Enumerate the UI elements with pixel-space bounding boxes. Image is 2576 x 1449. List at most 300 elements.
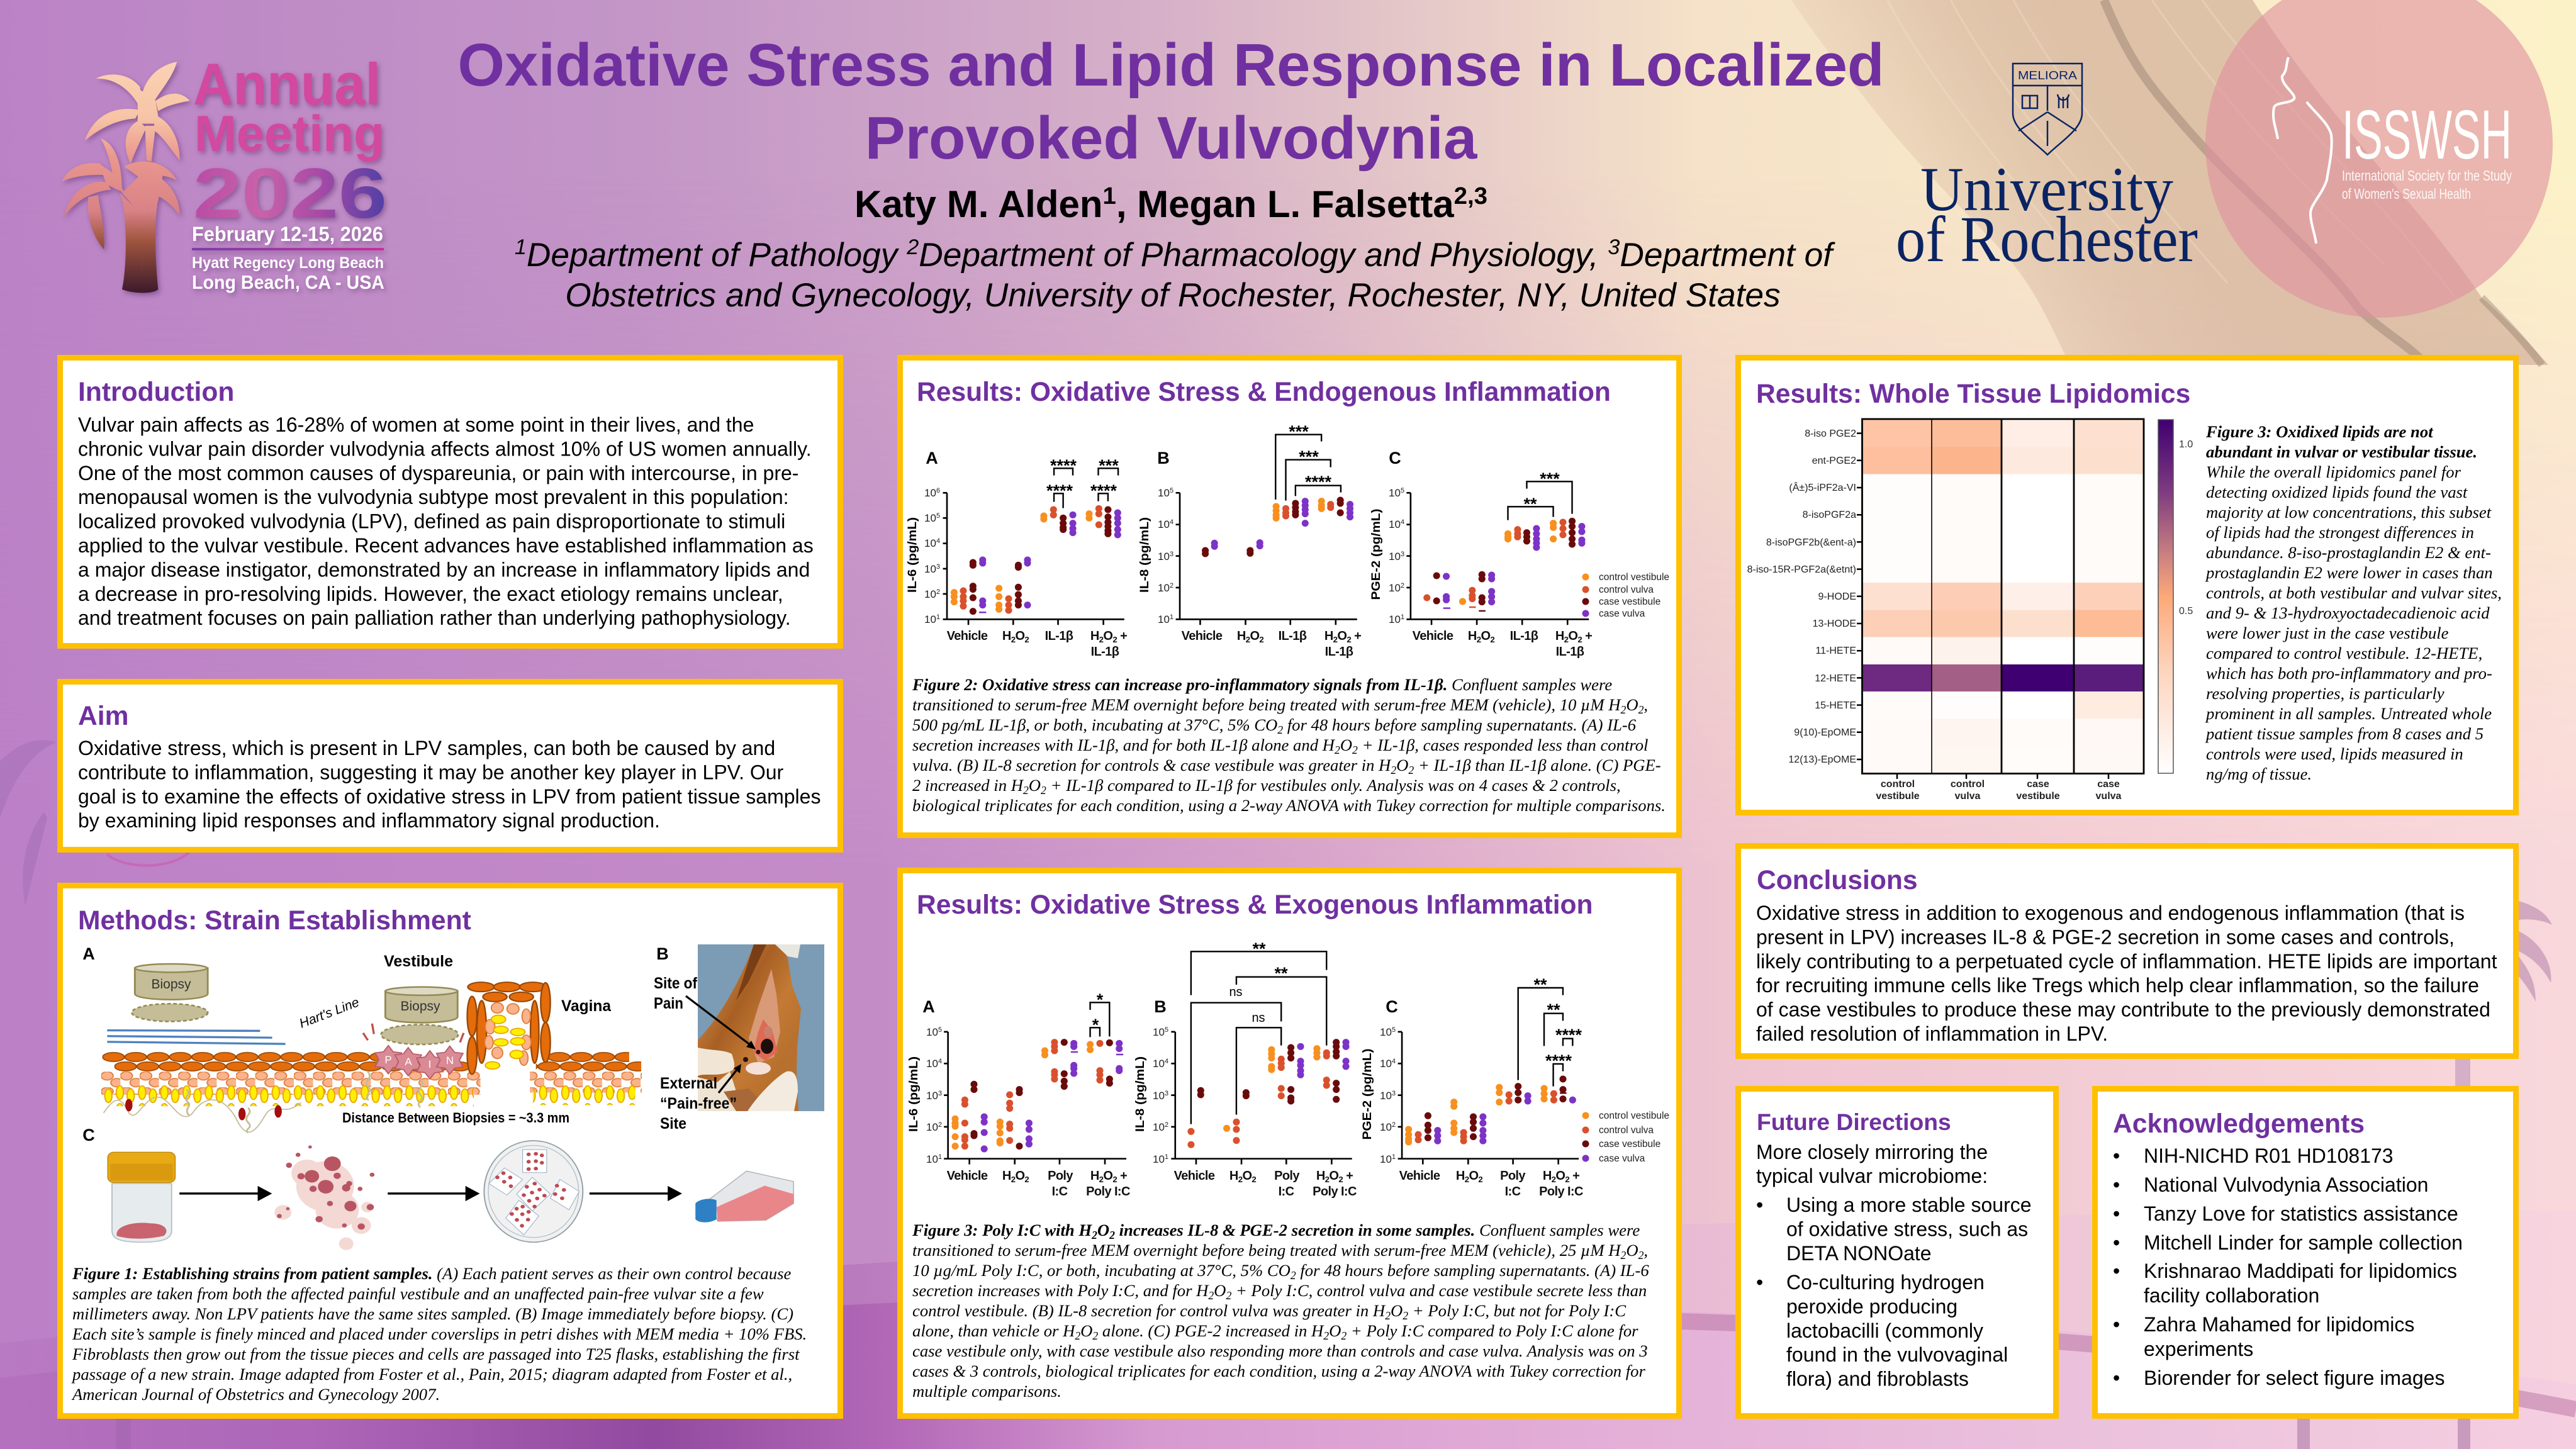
- text: conclusions body: for recruiting immune cells like Tregs which help clear inflammation, so the failure: [1756, 974, 2479, 997]
- chart: figure 2 A/B/C dot plots: ****: [1090, 481, 1117, 500]
- text: future directions body: found in the vulvovaginal: [1786, 1343, 2008, 1366]
- chart: figure 3 A/B/C dot plots: H2O2: [1456, 1169, 1482, 1184]
- heading: exogenous results: Results: Oxidative Stress & Exogenous Inflammation: [917, 890, 1593, 920]
- chart: figure 3 A/B/C dot plots: IL-6 (pg/mL): [907, 1056, 921, 1132]
- chart: figure 2 A/B/C dot plots: H2O2: [1468, 629, 1494, 644]
- diagram: biopsy sites in tissue: [101, 964, 642, 1133]
- panel: aim: [60, 682, 841, 849]
- title: Provoked Vulvodynia: [865, 104, 1477, 172]
- affiliations: Obstetrics and Gynecology, University of Rochester, Rochester, NY, United States: [565, 277, 1781, 314]
- caption: figure 3 lipidomics: detecting oxidized lipids found the vast: [2206, 483, 2468, 501]
- labels: photo: “Pain-free”: [660, 1095, 737, 1112]
- chart: figure 2 A/B/C dot plots: 104: [1389, 518, 1404, 530]
- list: acknowledgements: •: [2113, 1144, 2120, 1167]
- chart: figure 3 A/B/C dot plots: H2O2 +: [1316, 1169, 1353, 1184]
- caption: figure 3 poly I:C: [912, 1221, 1649, 1401]
- chart: figure 3 A/B/C dot plots: ****: [1545, 1051, 1572, 1070]
- heading: future directions: Future Directions: [1757, 1109, 1951, 1135]
- chart: lipid heatmap: 11-HETE: [1815, 646, 1856, 656]
- text: conclusions body: [1756, 902, 2497, 1045]
- text: future directions body: Using a more stable source: [1786, 1194, 2032, 1216]
- color scale: 0.5: [2179, 606, 2193, 617]
- text: future directions body: [1756, 1141, 2032, 1390]
- list: acknowledgements: Zahra Mahamed for lipidomics: [2144, 1313, 2414, 1336]
- text: introduction body: Vulvar pain affects as 16-28% of women at some point in their lives, and the: [78, 413, 754, 436]
- chart: lipid heatmap: case: [2097, 779, 2120, 790]
- chart: figure 2 A/B/C dot plots: H2O2 +: [1555, 629, 1592, 644]
- significance brackets: [1054, 435, 1572, 520]
- legend: case vulva: [1599, 1153, 1645, 1164]
- text: future directions body: of oxidative stress, such as: [1786, 1217, 2028, 1240]
- chart: figure 2 A/B/C dot plots: IL-8 (pg/mL): [1138, 517, 1151, 593]
- chart: figure 3 A/B/C dot plots: 102: [926, 1121, 942, 1133]
- heading: endogenous results: Results: Oxidative Stress & Endogenous Inflammation: [917, 377, 1611, 407]
- chart: figure 3 A/B/C dot plots: Poly: [1048, 1169, 1073, 1183]
- text: future directions body: DETA NONOate: [1786, 1242, 1932, 1265]
- chart: figure 2 A/B/C dot plots: Vehicle: [1182, 629, 1223, 643]
- labels: biopsy diagram: [82, 944, 669, 1144]
- labels: photo: Site of: [654, 975, 698, 992]
- caption: figure 3 lipidomics: abundant in vulvar or vestibular tissue.: [2206, 442, 2477, 461]
- title: Oxidative Stress and Lipid Response in Localized: [457, 31, 1884, 99]
- list: acknowledgements: NIH-NICHD R01 HD108173: [2144, 1144, 2394, 1167]
- caption: figure 2: vulva. (B) IL-8 secretion for controls & case vestibule was greater in H2O2 + IL-1β than IL-1β alone. (C) PGE-: [912, 756, 1661, 776]
- chart: figure 3 A/B/C dot plots: **: [1252, 939, 1266, 958]
- chart: figure 2 A/B/C dot plots: ***: [1289, 422, 1309, 441]
- chart: lipid heatmap: 8-iso PGE2: [1805, 428, 1856, 439]
- chart: figure 3 A/B/C dot plots: 103: [1380, 1090, 1396, 1102]
- chart: figure 3 A/B/C dot plots: H2O2: [1002, 1169, 1029, 1184]
- caption: figure 3 lipidomics: of lipids had the strongest differences in: [2206, 523, 2474, 542]
- legend: control vulva: [1599, 585, 1654, 595]
- list: acknowledgements: [2113, 1144, 2463, 1389]
- chart: lipid heatmap: 8-isoPGF2b(&ent-a): [1766, 537, 1856, 548]
- logo: ISSWSH: International Society for the Study: [2342, 167, 2512, 184]
- text: conclusions body: present in LPV) increases IL-8 & PGE-2 secretion in some cases and controls,: [1756, 926, 2455, 948]
- caption: figure 3 lipidomics: abundance. 8-iso-prostaglandin E2 & ent-: [2206, 543, 2491, 562]
- panel: methods: [60, 886, 841, 1416]
- chart: figure 2 A/B/C dot plots: PGE-2 (pg/mL): [1370, 508, 1383, 600]
- affiliations: 1Department of Pathology 2Department of Pharmacology and Physiology, 3Department of: [515, 235, 1835, 274]
- chart: figure 2 A/B/C dot plots: 104: [924, 537, 940, 549]
- chart: lipid heatmap: (Â±)5-iPF2a-VI: [1789, 481, 1856, 493]
- color scale: [2158, 420, 2193, 773]
- caption: figure 1: passage of a new strain. Image adapted from Foster et al., Pain, 2015; diagram adapted from Foster et al.,: [71, 1365, 792, 1384]
- chart: figure 3 A/B/C dot plots: 101: [1380, 1153, 1396, 1165]
- icon: culture flask: [695, 1171, 793, 1222]
- chart: figure 2 A/B/C dot plots: 101: [924, 613, 940, 625]
- data dots: [954, 501, 1554, 609]
- list: acknowledgements: Krishnarao Maddipati for lipidomics: [2144, 1260, 2457, 1282]
- chart: lipid heatmap: vulva: [1955, 791, 1981, 802]
- caption: figure 3 lipidomics: While the overall lipidomics panel for: [2206, 462, 2461, 481]
- icon: petri dish: [484, 1141, 583, 1242]
- caption: figure 3 lipidomics: prostaglandin E2 were lower in cases than: [2205, 563, 2493, 582]
- chart: lipid heatmap: vulva: [2096, 791, 2122, 802]
- labels: biopsy diagram: Hart's Line: [298, 995, 361, 1031]
- chart: figure 3 A/B/C dot plots: 102: [1153, 1121, 1168, 1133]
- chart: figure 2 A/B/C dot plots: IL-1β: [1091, 645, 1119, 659]
- heading: acknowledgements: Acknowledgements: [2113, 1109, 2365, 1139]
- text: future directions body: peroxide producing: [1786, 1295, 1957, 1318]
- caption: figure 3 poly I:C: transitioned to serum-free MEM overnight before being treated with serum-free MEM (vehicle), 25 µM H2O2,: [912, 1241, 1648, 1262]
- labels: biopsy diagram: A: [82, 944, 95, 963]
- logo wordmark: 2026: [193, 154, 387, 233]
- chart: lipid heatmap: [1747, 419, 2193, 802]
- caption: figure 3 lipidomics: compared to control vestibule. 12-HETE,: [2206, 644, 2482, 663]
- caption: figure 3 lipidomics: majority at low concentrations, this subset: [2206, 503, 2492, 522]
- chart: figure 2 A/B/C dot plots: 104: [1158, 518, 1173, 530]
- panel: results exogenous inflammation: [900, 871, 1679, 1416]
- caption: figure 1: Fibroblasts then grow out from the tissue pieces and cells are passaged into T25 flasks, establishing the first: [72, 1345, 800, 1363]
- caption: figure 1: [71, 1264, 807, 1404]
- chart: figure 2 A/B/C dot plots: IL-1β: [1556, 645, 1584, 659]
- chart: figure 3 A/B/C dot plots: 102: [1380, 1121, 1396, 1133]
- labels: photo: Pain: [654, 995, 683, 1012]
- logo: ISSWSH: of Women's Sexual Health: [2342, 186, 2471, 202]
- labels: biopsy diagram: A: [405, 1056, 412, 1068]
- chart: figure 3 A/B/C dot plots: Poly I:C: [1313, 1185, 1357, 1199]
- chart: figure 2 A/B/C dot plots: Vehicle: [1413, 629, 1453, 643]
- chart: figure 3 A/B/C dot plots: *: [1092, 1015, 1099, 1034]
- labels: photo: External: [660, 1075, 717, 1092]
- list: acknowledgements: facility collaboration: [2144, 1284, 2319, 1307]
- chart: figure 2 A/B/C dot plots: 101: [1158, 613, 1173, 625]
- chart: figure 2 A/B/C dot plots: 103: [1158, 551, 1173, 562]
- chart: figure 3 A/B/C dot plots: C: [1386, 997, 1398, 1016]
- chart: lipid heatmap: 8-isoPGF2a: [1803, 510, 1856, 520]
- caption: figure 2: [912, 675, 1666, 815]
- icon: Meliora shield: [2013, 64, 2082, 155]
- labels: photo: Site: [660, 1115, 686, 1133]
- panel: acknowledgements: [2095, 1088, 2516, 1416]
- caption: figure 3 poly I:C: cases & 3 controls, biological triplicates for each condition, using a 2-way ANOVA with Tukey correction for: [912, 1362, 1645, 1380]
- list: acknowledgements: •: [2113, 1313, 2120, 1336]
- list: acknowledgements: Tanzy Love for statistics assistance: [2144, 1202, 2458, 1225]
- text: introduction body: and treatment focuses on pain palliation rather than underlying pathophysiology.: [78, 607, 791, 629]
- text: future directions body: •: [1756, 1194, 1763, 1216]
- labels: biopsy diagram: Distance Between Biopsies = ~3.3 mm: [342, 1110, 569, 1126]
- list: acknowledgements: •: [2113, 1231, 2120, 1254]
- axes: [944, 1032, 1126, 1165]
- conference logo: Annual Meeting 2026: [62, 51, 387, 293]
- chart: figure 3 A/B/C dot plots: 105: [1380, 1026, 1396, 1038]
- chart: figure 3 A/B/C dot plots: ****: [1555, 1026, 1582, 1044]
- caption: figure 2: secretion increases with IL-1β, and for both IL-1β alone and H2O2 + IL-1β, cases responded less than control: [912, 736, 1648, 756]
- caption: figure 3 lipidomics: Figure 3: Oxidixed lipids are not: [2205, 422, 2434, 441]
- list: acknowledgements: experiments: [2144, 1338, 2253, 1360]
- chart: figure 3 A/B/C dot plots: 104: [1153, 1058, 1168, 1070]
- chart: figure 3 A/B/C dot plots: 101: [926, 1153, 942, 1165]
- chart: figure 2 A/B/C dot plots: 105: [1389, 487, 1404, 499]
- chart: figure 3 A/B/C dot plots: A: [922, 997, 935, 1016]
- chart: figure 2 A/B/C dot plots: 103: [924, 563, 940, 575]
- text: conclusions body: Oxidative stress in addition to exogenous and endogenous inflammation (that is: [1756, 902, 2465, 924]
- caption: figure 3 poly I:C: Figure 3: Poly I:C with H2O2 increases IL-8 & PGE-2 secretion in some samples. Confluent samples were: [912, 1221, 1640, 1241]
- caption: figure 3 lipidomics: prominent in all samples. Untreated whole: [2205, 704, 2492, 723]
- caption: figure 1: Each site’s sample is finely minced and placed under coverslips in petri dishes with MEM media + 10% FBS.: [72, 1324, 807, 1343]
- color scale: 1.0: [2179, 439, 2193, 450]
- chart: figure 2 A/B/C dot plots: IL-1β: [1510, 629, 1538, 643]
- logo: University of Rochester: [1896, 64, 2198, 276]
- significance brackets: [1090, 951, 1572, 1124]
- chart: figure 2 A/B/C dot plots: ****: [1046, 481, 1073, 500]
- chart: figure 2 A/B/C dot plots: H2O2: [1002, 629, 1029, 644]
- chart: figure 3 A/B/C dot plots: 104: [926, 1058, 942, 1070]
- text: future directions body: Co-culturing hydrogen: [1786, 1271, 1985, 1294]
- chart: figure 3 A/B/C dot plots: Poly I:C: [1539, 1185, 1583, 1199]
- chart: figure 3 A/B/C dot plots: ns: [1229, 985, 1243, 999]
- icon: female silhouette: [2273, 57, 2332, 243]
- caption: figure 1: millimeters away. Non LPV patients have the same sites sampled. (B) Image immediately before biopsy. (C): [72, 1304, 793, 1323]
- caption: figure 3 lipidomics: controls were used, lipids measured in: [2206, 744, 2463, 763]
- text: aim body: contribute to inflammation, suggesting it may be another key player in LPV. Our: [78, 761, 784, 783]
- heading: methods: Methods: Strain Establishment: [78, 905, 471, 936]
- text: introduction body: menopausal women is the vulvodynia subtype most prevalent in this population:: [78, 486, 789, 508]
- caption: figure 3 lipidomics: controls, at both vestibular and vulvar sites,: [2206, 583, 2502, 602]
- caption: figure 3 lipidomics: [2205, 422, 2502, 783]
- chart: lipid heatmap: ent-PGE2: [1812, 456, 1856, 466]
- chart: figure 3 A/B/C dot plots: H2O2: [1229, 1169, 1256, 1184]
- text: future directions body: lactobacilli (commonly: [1786, 1319, 1983, 1342]
- text: aim body: Oxidative stress, which is present in LPV samples, can both be caused by and: [78, 737, 775, 759]
- chart: lipid heatmap: control: [1951, 779, 1985, 790]
- chart: figure 3 A/B/C dot plots: *: [1097, 990, 1104, 1009]
- chart: figure 3 A/B/C dot plots: Vehicle: [1399, 1169, 1440, 1183]
- chart: figure 3 A/B/C dot plots: H2O2 +: [1543, 1169, 1579, 1184]
- data dots: [955, 1044, 1544, 1146]
- caption: figure 3 poly I:C: secretion increases with Poly I:C, and for H2O2 + Poly I:C, control vulva and case vestibule secrete less than: [912, 1281, 1647, 1302]
- chart: figure 2 A/B/C dot plots: 101: [1389, 613, 1404, 625]
- chart: lipid heatmap: vestibule: [2016, 791, 2060, 802]
- list: acknowledgements: Mitchell Linder for sample collection: [2144, 1231, 2463, 1254]
- chart: figure 2 A/B/C dot plots: IL-6 (pg/mL): [906, 517, 919, 593]
- chart: figure 2 A/B/C dot plots: **: [1523, 495, 1537, 513]
- caption: figure 3 poly I:C: case vestibule only, with case vestibule also responding more than controls and case vulva. Analysis was on 3: [912, 1341, 1648, 1360]
- logo wordmark: Meeting: [194, 106, 384, 162]
- labels: biopsy diagram: N: [446, 1055, 454, 1066]
- chart: figure 3 A/B/C dot plots: 104: [1380, 1058, 1396, 1070]
- chart: figure 2 A/B/C dot plots: A: [926, 449, 938, 467]
- chart: figure 3 A/B/C dot plots: 105: [926, 1026, 942, 1038]
- caption: figure 2: 2 increased in H2O2 + IL-1β compared to IL-1β for vestibules only. Analysis was on 4 cases & 2 controls,: [912, 776, 1621, 797]
- chart: lipid heatmap: 12-HETE: [1815, 673, 1856, 684]
- chart: figure 3 A/B/C dot plots: Poly: [1500, 1169, 1526, 1183]
- logo: University of Rochester: University: [1920, 154, 2173, 224]
- legend: case vestibule: [1599, 596, 1660, 607]
- chart: figure 2 A/B/C dot plots: 102: [1389, 582, 1404, 594]
- heading: conclusions: Conclusions: [1757, 865, 1918, 895]
- authors: Katy M. Alden1, Megan L. Falsetta2,3: [854, 182, 1487, 225]
- chart: figure 2 A/B/C dot plots: [906, 422, 1669, 659]
- logo wordmark: February 12-15, 2026: [192, 223, 383, 245]
- logo wordmark: Long Beach, CA - USA: [192, 271, 384, 293]
- legend: [1582, 1111, 1669, 1164]
- chart: figure 3 A/B/C dot plots: I:C: [1052, 1185, 1068, 1199]
- legend: control vulva: [1599, 1125, 1654, 1136]
- text: aim body: by examining lipid responses and inflammatory signal production.: [78, 809, 660, 832]
- chart: figure 2 A/B/C dot plots: IL-1β: [1279, 629, 1307, 643]
- title: [457, 31, 1884, 172]
- chart: figure 2 A/B/C dot plots: H2O2 +: [1090, 629, 1127, 644]
- panel: introduction: [60, 357, 841, 646]
- chart: figure 3 A/B/C dot plots: B: [1154, 997, 1167, 1016]
- text: introduction body: localized provoked vulvodynia (LPV), defined as pain disproportionate to stimuli: [78, 510, 785, 533]
- logo: University of Rochester: of Rochester: [1896, 203, 2198, 276]
- list: acknowledgements: Biorender for select figure images: [2144, 1367, 2444, 1389]
- labels: biopsy diagram: Biopsy: [151, 977, 191, 992]
- text: introduction body: chronic vulvar pain disorder vulvodynia affects almost 10% of US women annually.: [78, 437, 812, 460]
- icon: palm trees: [62, 62, 190, 293]
- icon: specimen jar: [108, 1152, 175, 1242]
- chart: lipid heatmap: control: [1881, 779, 1915, 790]
- logo wordmark: Hyatt Regency Long Beach: [192, 254, 384, 272]
- text: conclusions body: likely contributing to a perpetuated cycle of inflammation. HETE lipids are important: [1756, 950, 2497, 973]
- arrow: [388, 1188, 478, 1199]
- chart: figure 3 A/B/C dot plots: H2O2 +: [1090, 1169, 1127, 1184]
- text: conclusions body: failed resolution of inflammation in LPV.: [1756, 1022, 2108, 1045]
- logo: ISSWSH: [2273, 57, 2512, 243]
- chart: figure 2 A/B/C dot plots: IL-1β: [1045, 629, 1073, 643]
- icon: minced tissue: [274, 1145, 374, 1250]
- chart: figure 3 A/B/C dot plots: 105: [1153, 1026, 1168, 1038]
- legend: case vestibule: [1599, 1139, 1660, 1150]
- labels: biopsy diagram: P: [384, 1054, 392, 1066]
- logo wordmark: [192, 51, 387, 293]
- chart: figure 2 A/B/C dot plots: ***: [1099, 456, 1119, 475]
- list: acknowledgements: •: [2113, 1367, 2120, 1389]
- text: introduction body: applied to the vulvar vestibule. Recent advances have established inflammation as: [78, 534, 814, 557]
- caption: figure 3 poly I:C: multiple comparisons.: [912, 1382, 1061, 1401]
- labels: biopsy diagram: Vagina: [561, 997, 612, 1015]
- list: acknowledgements: •: [2113, 1173, 2120, 1196]
- icon: Meliora shield: MELIORA: [2018, 69, 2077, 82]
- photo: biopsy site: [686, 944, 824, 1111]
- legend: control vestibule: [1599, 1111, 1669, 1121]
- text: aim body: [78, 737, 820, 832]
- text: introduction body: a decrease in pro-resolving lipids. However, the exact etiology remains unclear,: [78, 583, 783, 605]
- chart: figure 2 A/B/C dot plots: C: [1389, 449, 1401, 467]
- chart: figure 2 A/B/C dot plots: ***: [1299, 447, 1319, 466]
- chart: figure 3 A/B/C dot plots: ns: [1252, 1011, 1265, 1025]
- list: acknowledgements: •: [2113, 1260, 2120, 1282]
- chart: figure 3 A/B/C dot plots: I:C: [1279, 1185, 1294, 1199]
- caption: figure 2: 500 pg/mL IL-1β, or both, incubating at 37°C, 5% CO2 for 48 hours before sampling supernatants. (A) IL-6: [912, 715, 1637, 736]
- caption: figure 2: biological triplicates for each condition, using a 2-way ANOVA with Tukey correction for multiple comparisons.: [912, 796, 1666, 815]
- affiliations: [515, 235, 1835, 314]
- list: acknowledgements: •: [2113, 1202, 2120, 1225]
- legend: [1582, 572, 1669, 619]
- chart: lipid heatmap: 12(13)-EpOME: [1788, 754, 1856, 765]
- chart: figure 2 A/B/C dot plots: 102: [924, 588, 940, 600]
- caption: figure 3 lipidomics: which has both pro-inflammatory and pro-: [2206, 664, 2492, 683]
- chart: figure 2 A/B/C dot plots: 102: [1158, 582, 1173, 594]
- axes: [943, 493, 1124, 625]
- caption: figure 3 lipidomics: resolving properties, is particularly: [2206, 684, 2444, 703]
- chart: figure 3 A/B/C dot plots: Poly: [1274, 1169, 1300, 1183]
- chart: figure 3 A/B/C dot plots: IL-8 (pg/mL): [1134, 1056, 1147, 1132]
- text: introduction body: [78, 413, 814, 629]
- chart: figure 3 A/B/C dot plots: I:C: [1505, 1185, 1521, 1199]
- arrow: [179, 1188, 270, 1199]
- text: conclusions body: of case vestibules to produce these may contribute to the previously demonstrated: [1756, 999, 2490, 1021]
- chart: figure 3 A/B/C dot plots: PGE-2 (pg/mL): [1361, 1048, 1374, 1140]
- chart: figure 2 A/B/C dot plots: 106: [924, 487, 940, 499]
- chart: figure 3 A/B/C dot plots: Poly I:C: [1086, 1185, 1130, 1199]
- chart: figure 3 A/B/C dot plots: **: [1533, 975, 1547, 994]
- labels: biopsy diagram: C: [82, 1126, 95, 1144]
- heading: introduction: Introduction: [78, 377, 234, 407]
- chart: figure 2 A/B/C dot plots: IL-1β: [1325, 645, 1353, 659]
- chart: figure 3 A/B/C dot plots: **: [1274, 964, 1288, 983]
- chart: figure 2 A/B/C dot plots: ****: [1050, 456, 1077, 475]
- chart: figure 2 A/B/C dot plots: H2O2: [1237, 629, 1263, 644]
- chart: figure 3 A/B/C dot plots: 103: [926, 1090, 942, 1102]
- chart: lipid heatmap: 8-iso-15R-PGF2a(&etnt): [1747, 564, 1856, 575]
- caption: figure 1: American Journal of Obstetrics and Gynecology 2007.: [71, 1385, 440, 1404]
- chart: lipid heatmap: 9-HODE: [1818, 591, 1856, 602]
- legend: control vestibule: [1599, 572, 1669, 583]
- chart: figure 2 A/B/C dot plots: Vehicle: [947, 629, 988, 643]
- caption: figure 1: samples are taken from both the affected painful vestibule and an unaffected pain-free vulvar site a few: [72, 1284, 764, 1303]
- chart: figure 2 A/B/C dot plots: H2O2 +: [1324, 629, 1361, 644]
- chart: figure 2 A/B/C dot plots: B: [1157, 449, 1170, 467]
- caption: figure 3 lipidomics: and 9- & 13-hydroxyoctadecadienoic acid: [2206, 603, 2490, 622]
- caption: figure 3 poly I:C: alone, than vehicle or H2O2 alone. (C) PGE-2 increased in H2O2 + Poly I:C compared to Poly I:C alone for: [912, 1321, 1638, 1342]
- chart: figure 2 A/B/C dot plots: ****: [1305, 473, 1332, 491]
- chart: figure 3 A/B/C dot plots: 101: [1153, 1153, 1168, 1165]
- chart: lipid heatmap: case: [2027, 779, 2049, 790]
- labels: photo: [654, 975, 737, 1133]
- labels: biopsy diagram: B: [656, 944, 669, 963]
- chart: lipid heatmap: 15-HETE: [1815, 700, 1856, 711]
- list: acknowledgements: National Vulvodynia Association: [2144, 1173, 2428, 1196]
- arrow: [590, 1188, 680, 1199]
- chart: figure 3 A/B/C dot plots: 103: [1153, 1090, 1168, 1102]
- caption: figure 3 poly I:C: 10 µg/mL Poly I:C, or both, incubating at 37°C, 5% CO2 for 48 hours before sampling supernatants. (A) IL-6: [912, 1261, 1649, 1282]
- text: future directions body: typical vulvar microbiome:: [1756, 1165, 1988, 1187]
- chart: lipid heatmap: 9(10)-EpOME: [1794, 727, 1856, 738]
- panel: future directions: [1738, 1088, 2056, 1416]
- text: future directions body: flora) and fibroblasts: [1786, 1368, 1969, 1390]
- panel: conclusions: [1738, 846, 2516, 1056]
- text: aim body: goal is to examine the effects of oxidative stress in LPV from patient tissue samples: [78, 785, 820, 808]
- chart: figure 3 A/B/C dot plots: **: [1547, 1000, 1560, 1019]
- caption: figure 3 lipidomics: ng/mg of tissue.: [2206, 764, 2312, 783]
- panel: whole tissue lipidomics: [1738, 357, 2516, 813]
- legend: case vulva: [1599, 608, 1645, 619]
- chart: figure 2 A/B/C dot plots: ***: [1540, 469, 1560, 488]
- caption: figure 1: Figure 1: Establishing strains from patient samples. (A) Each patient serves as their own control because: [72, 1264, 791, 1283]
- diagram: strain establishment workflow: [108, 1141, 793, 1250]
- chart: figure 2 A/B/C dot plots: 103: [1389, 551, 1404, 562]
- text: introduction body: a major disease instigator, demonstrated by an increase in inflammatory lipids and: [78, 558, 810, 581]
- heading: lipidomics: Results: Whole Tissue Lipidomics: [1756, 379, 2190, 409]
- caption: figure 3 lipidomics: patient tissue samples from 8 cases and 5: [2205, 724, 2484, 743]
- chart: lipid heatmap: 13-HODE: [1813, 618, 1856, 629]
- labels: biopsy diagram: I: [428, 1058, 431, 1070]
- chart: figure 3 A/B/C dot plots: Vehicle: [947, 1169, 988, 1183]
- caption: figure 3 poly I:C: control vestibule. (B) IL-8 secretion for control vulva was greater in H2O2 + Poly I:C, but not for Poly I:C: [912, 1301, 1627, 1322]
- labels: biopsy diagram: Vestibule: [384, 953, 453, 970]
- text: introduction body: One of the most common causes of dyspareunia, or pain with intercourse, in pre-: [78, 462, 798, 484]
- chart: lipid heatmap: vestibule: [1876, 791, 1920, 802]
- panel: results endogenous inflammation: [900, 357, 1679, 836]
- text: future directions body: •: [1756, 1271, 1763, 1294]
- text: future directions body: More closely mirroring the: [1756, 1141, 1988, 1163]
- labels: biopsy diagram: Biopsy: [400, 999, 440, 1014]
- chart: figure 3 A/B/C dot plots: Vehicle: [1174, 1169, 1215, 1183]
